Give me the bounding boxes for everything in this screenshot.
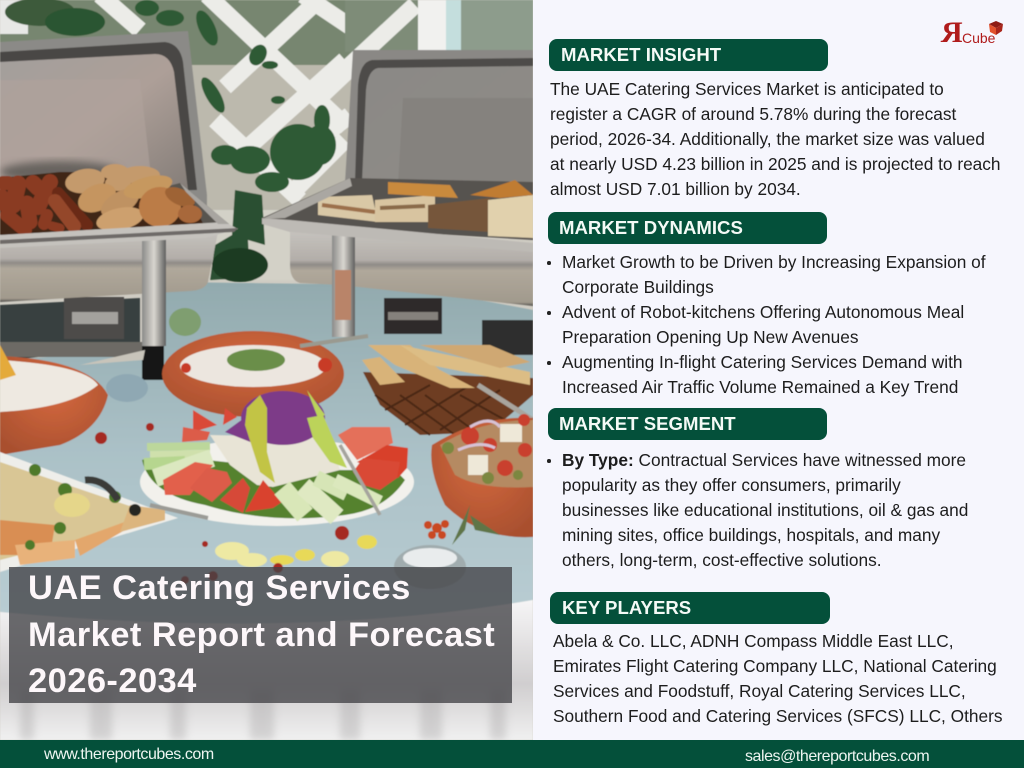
- title: Market Report and Forecast: [28, 616, 495, 654]
- heading: key players: KEY PLAYERS: [562, 597, 691, 618]
- tomatoes right: [338, 427, 393, 460]
- left chafer food: [0, 172, 205, 236]
- canape platter: [0, 452, 178, 572]
- text: key players: Services and Foodstuff, Royal Catering Services LLC,: [553, 681, 966, 701]
- background greenery and lattice: [0, 0, 420, 70]
- logo wordmark: [940, 16, 995, 49]
- tomatoes left: [163, 408, 282, 513]
- right burner: [384, 298, 442, 334]
- text: market insight: The UAE Catering Services Market is anticipated to: [550, 79, 944, 99]
- title: UAE Catering Services: [28, 569, 411, 607]
- text: market insight: register a CAGR of around 5.78% during the forecast: [550, 104, 956, 124]
- title: 2026-2034: [28, 662, 197, 700]
- heading: market segment: [548, 408, 827, 440]
- heading: market insight: MARKET INSIGHT: [561, 44, 721, 65]
- slaw: [210, 435, 340, 487]
- list: market dynamics: Preparation Opening Up New Avenues: [562, 327, 859, 347]
- text: key players: Emirates Flight Catering Company LLC, National Catering: [553, 656, 997, 676]
- text: key players: [553, 631, 1003, 726]
- left chafer pan and stand: [0, 232, 218, 302]
- right chafing dish lid: [345, 50, 533, 190]
- center rice bowl: [162, 331, 344, 417]
- heading: market dynamics: MARKET DYNAMICS: [559, 217, 743, 238]
- list: market dynamics: [547, 252, 986, 397]
- list: market dynamics: Increased Air Traffic Volume Remained a Key Trend: [562, 377, 958, 397]
- list: market dynamics: Corporate Buildings: [562, 277, 714, 297]
- logo wordmark: Cube: [962, 30, 995, 46]
- salad plate: [140, 438, 414, 526]
- left burner: [0, 298, 140, 360]
- cucumbers: [282, 478, 380, 517]
- list: market dynamics: Market Growth to be Driven by Increasing Expansion of: [562, 252, 986, 272]
- text: market insight: period, 2026-34. Additionally, the market size was valued: [550, 129, 985, 149]
- text: market insight: [550, 79, 1001, 199]
- logo cube icon: [989, 21, 1003, 35]
- right chafer pan and stand: [290, 232, 533, 306]
- left chafing dish lid: [0, 31, 207, 240]
- list: market dynamics: Augmenting In-flight Catering Services Demand with: [562, 352, 963, 372]
- heading: market segment: MARKET SEGMENT: [559, 413, 736, 434]
- heading: market dynamics: [548, 212, 827, 244]
- right chafer food: [318, 180, 533, 238]
- text: market insight: at nearly USD 4.23 billion in 2025 and is projected to reach: [550, 154, 1001, 174]
- list: market segment: [547, 450, 968, 570]
- right column background: [533, 0, 1024, 740]
- footer email: sales@thereportcubes.com: [745, 748, 929, 765]
- heading: market insight: [549, 39, 828, 71]
- list: market segment: popularity as they offer consumers, primarily: [562, 475, 901, 495]
- cabbage and peppers: [241, 391, 325, 445]
- table surface: [0, 282, 533, 624]
- title: [28, 569, 495, 700]
- white tablecloth: [0, 600, 533, 740]
- left rice bowl: [0, 356, 108, 455]
- text: market insight: almost USD 7.01 billion by 2034.: [550, 179, 801, 199]
- footer bar: [0, 740, 1024, 768]
- logo wordmark: R: [941, 16, 963, 49]
- Greek salad bowl: [431, 418, 533, 537]
- list: market segment: By Type: Contractual Services have witnessed more: [562, 450, 966, 470]
- title overlay panel: [9, 567, 512, 703]
- logo: RCube: [940, 16, 1003, 49]
- text: key players: Abela & Co. LLC, ADNH Compass Middle East LLC,: [553, 631, 954, 651]
- photo: catering buffet with chafing dishes and salads: [0, 0, 533, 740]
- list: market dynamics: Advent of Robot-kitchens Offering Autonomous Meal: [562, 302, 964, 322]
- list: market segment: others, long-term, cost-effective solutions.: [562, 550, 882, 570]
- petals, berries and glass dish: [215, 535, 377, 567]
- heading: key players: [550, 592, 830, 624]
- list: market segment: mining sites, office buildings, hospitals, and many: [562, 525, 940, 545]
- text: key players: Southern Food and Catering Services (SFCS) LLC, Others: [553, 706, 1003, 726]
- list: market segment: businesses like educational institutions, oil & gas and: [562, 500, 968, 520]
- footer website: www.thereportcubes.com: [44, 746, 214, 763]
- bread basket: [363, 372, 533, 435]
